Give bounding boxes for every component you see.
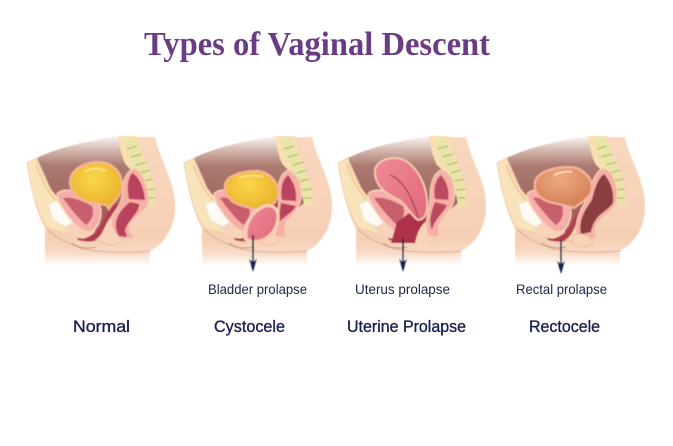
sublabel: uterus prolapse: Uterus prolapse: [355, 281, 450, 297]
sublabel: rectal prolapse: Rectal prolapse: [516, 281, 607, 297]
label: cystocele: Cystocele: [214, 318, 285, 336]
icon: perineum: [572, 234, 593, 247]
label: uterine prolapse: Uterine Prolapse: [347, 318, 466, 336]
icon: bladder: [225, 171, 278, 212]
icon: perineum: [415, 222, 431, 246]
icon: rectum: [111, 168, 149, 239]
title: Types of Vaginal Descent: [144, 26, 491, 63]
icon: rectum inner: [430, 175, 449, 230]
arrow: [557, 240, 565, 274]
icon: rectum inner: [580, 174, 613, 234]
panel: rectocele: [497, 136, 645, 274]
panel: cystocele: [184, 136, 332, 272]
icon: rectum: [426, 170, 455, 238]
label: normal: Normal: [73, 318, 130, 336]
icon: rectum: [576, 168, 617, 240]
icon: lower red area: [391, 212, 427, 243]
icon: bladder: [535, 167, 592, 208]
arrow: [249, 235, 257, 272]
label: rectocele: Rectocele: [529, 318, 600, 336]
icon: bladder bulge: [244, 204, 280, 243]
sublabel: bladder prolapse: Bladder prolapse: [208, 281, 307, 297]
icon: rectum: [275, 170, 301, 238]
icon: bladder: [70, 162, 122, 209]
icon: rectum inner: [279, 175, 296, 222]
panel: uterine prolapse: [338, 136, 486, 272]
panel: normal anatomy: [27, 136, 175, 265]
arrow: [399, 238, 407, 272]
icon: rectum inner: [116, 173, 145, 237]
icon: uterus: [375, 158, 427, 220]
